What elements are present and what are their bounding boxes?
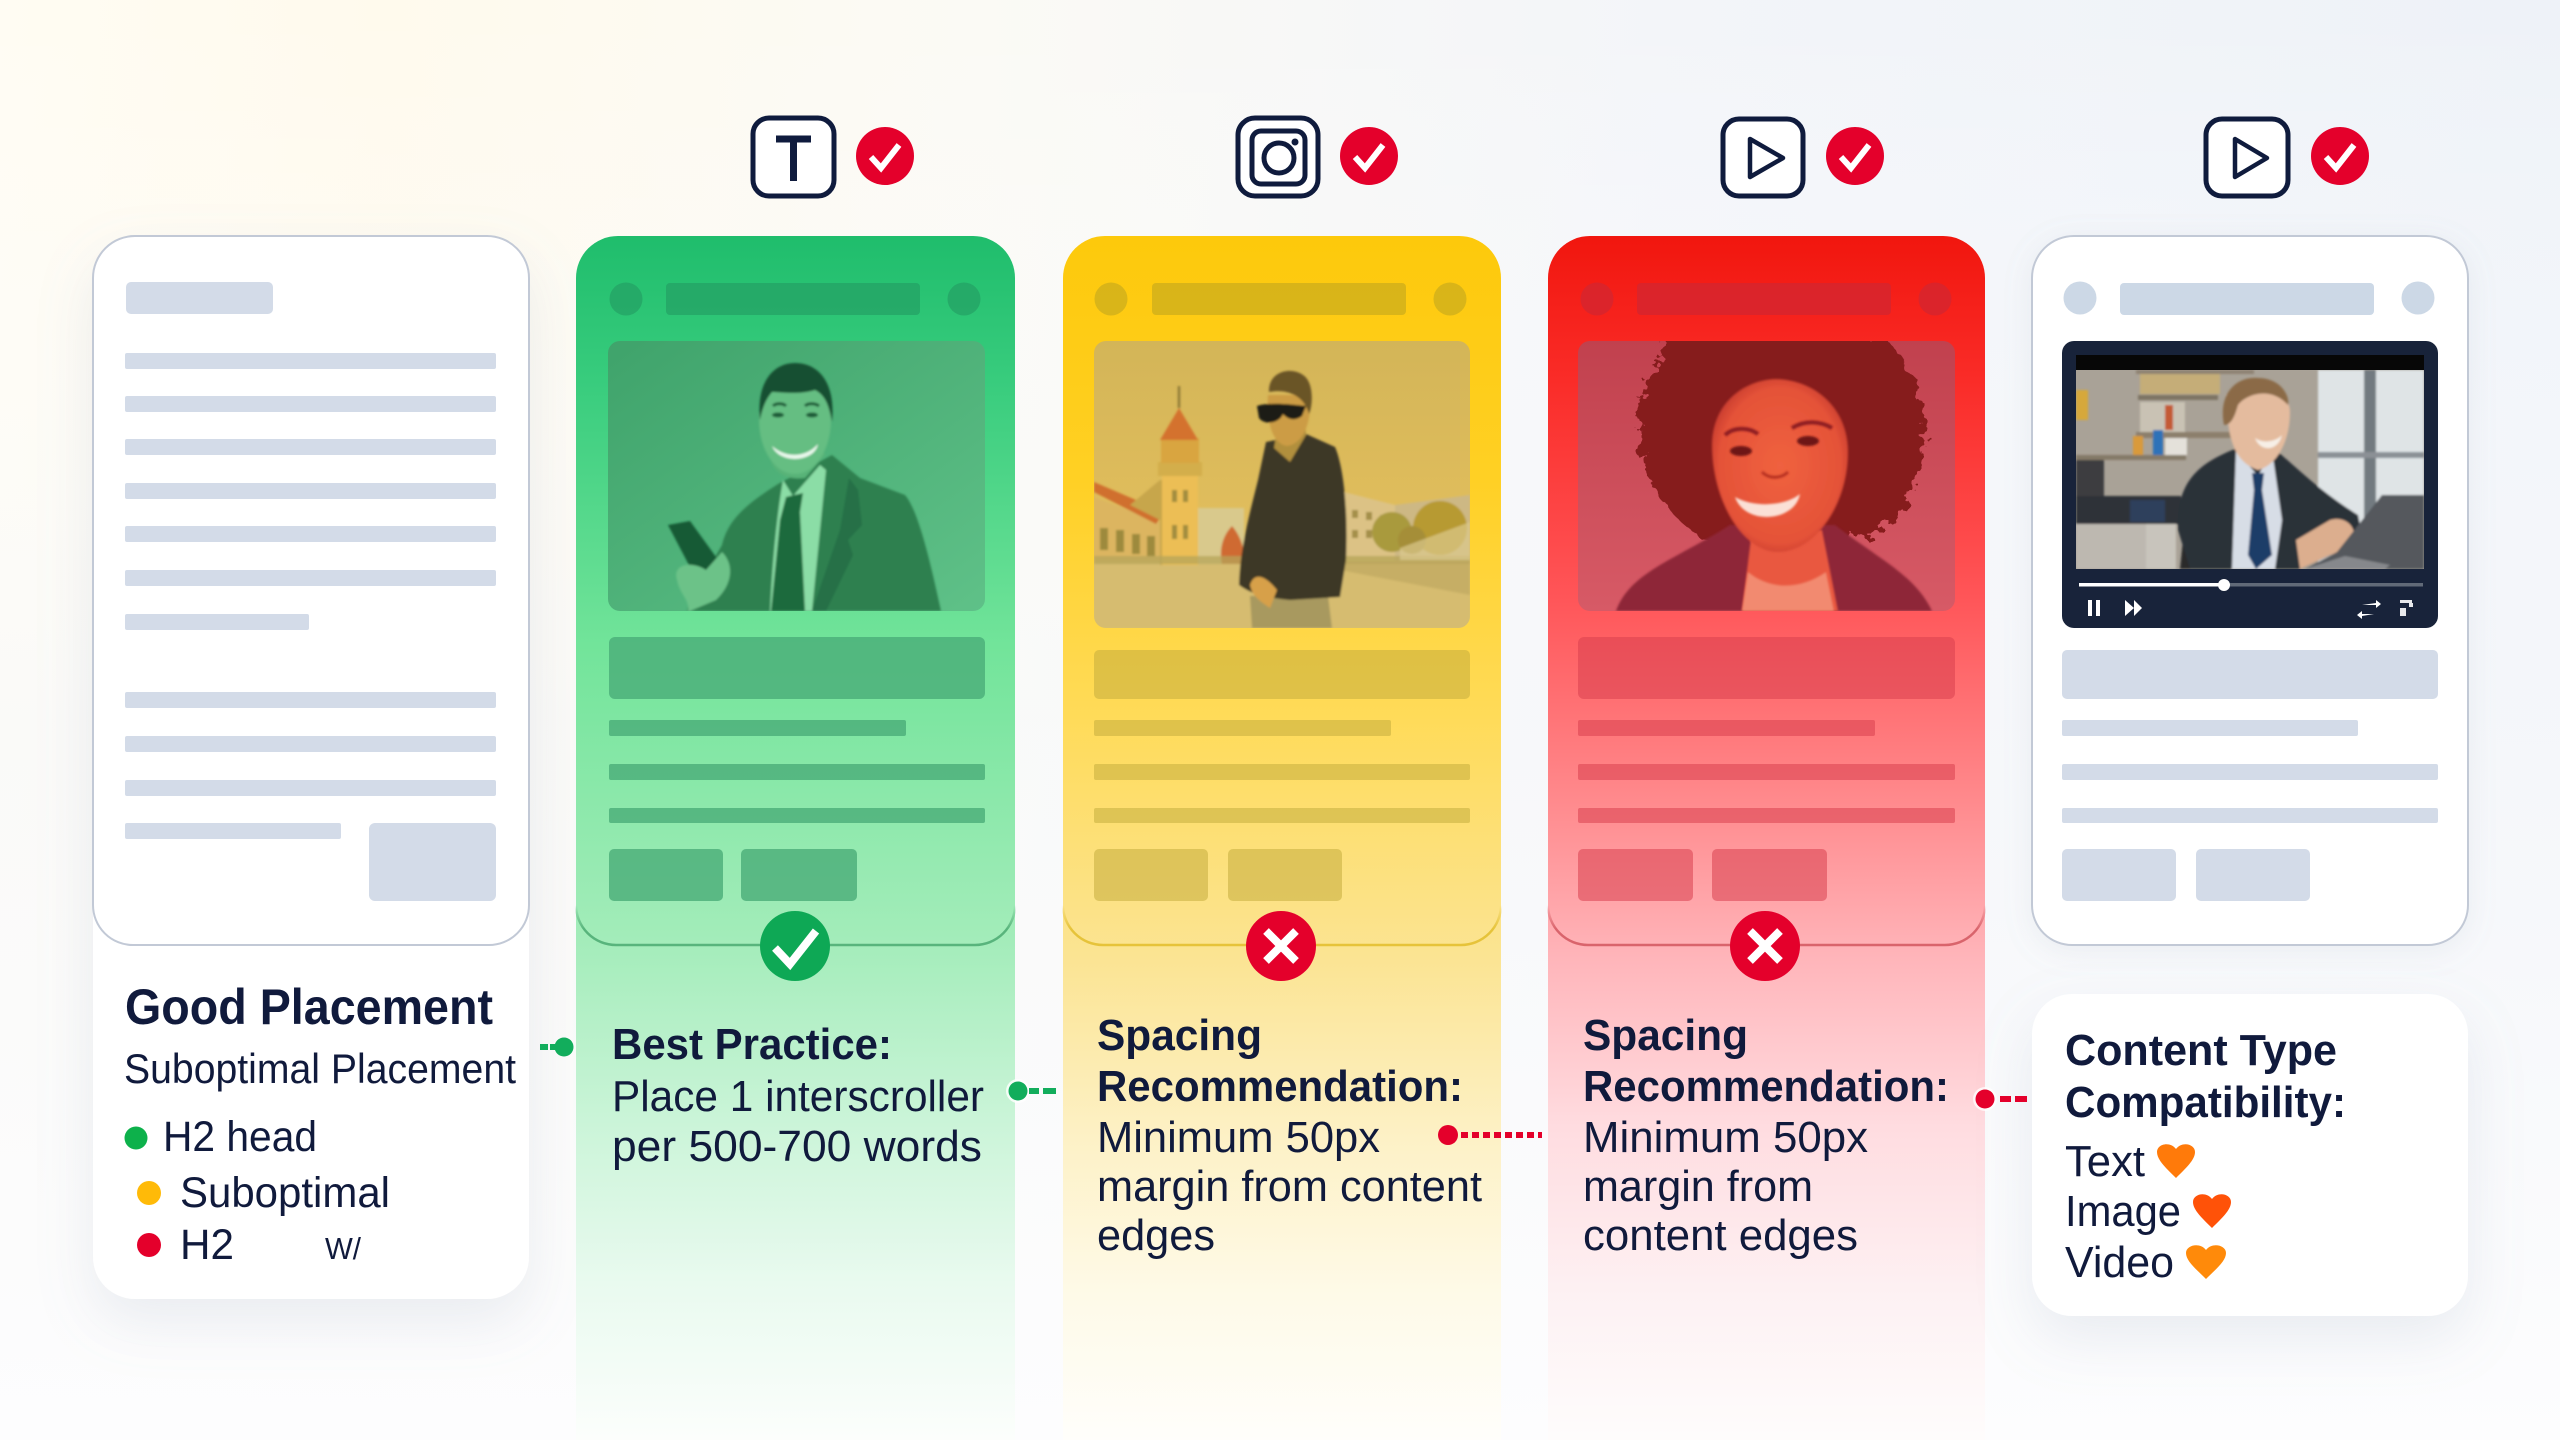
legend text: Suboptimal bbox=[180, 1169, 390, 1217]
card bottom edge bbox=[576, 905, 1015, 945]
legend text: W/ bbox=[325, 1231, 361, 1266]
video frame: man at laptop bbox=[2076, 370, 2424, 569]
spacing recommendation text: edges bbox=[1097, 1211, 1215, 1260]
header placeholders bbox=[1094, 282, 1466, 316]
icon: orange heart bbox=[2157, 1144, 2195, 1178]
connector: red dashed yellow to red bbox=[1438, 1125, 1542, 1145]
spacing recommendation text bbox=[1097, 1011, 1482, 1260]
icon: amber heart bbox=[2186, 1245, 2226, 1279]
content placeholders bbox=[1578, 637, 1955, 901]
best practice text: per 500-700 words bbox=[612, 1122, 982, 1171]
video player bbox=[2062, 341, 2438, 628]
spacing recommendation text: Spacing bbox=[1097, 1011, 1262, 1060]
icon: red-orange heart bbox=[2193, 1194, 2231, 1228]
yellow band bbox=[1063, 236, 1501, 1440]
best practice text bbox=[612, 1020, 984, 1171]
spacing recommendation text: content edges bbox=[1583, 1211, 1858, 1260]
header placeholders bbox=[2064, 282, 2434, 315]
icon: video format with check bbox=[1723, 119, 1884, 196]
photo: man with phone bbox=[608, 341, 985, 611]
panel: content type compatibility: Text bbox=[2065, 1137, 2145, 1186]
connector: red dashed to compatibility panel bbox=[1973, 1087, 2027, 1111]
photo: woman with curly hair bbox=[1578, 317, 1955, 611]
panel: content type compatibility: Compatibility: bbox=[2065, 1078, 2346, 1127]
panel: content type compatibility: Video bbox=[2065, 1238, 2174, 1287]
panel: content type compatibility bbox=[2032, 994, 2468, 1316]
content placeholders bbox=[1094, 650, 1470, 901]
spacing recommendation text bbox=[1583, 1011, 1949, 1260]
spacing recommendation text: margin from content bbox=[1097, 1162, 1482, 1211]
panel: text article card bbox=[93, 236, 529, 1299]
article text placeholders bbox=[125, 282, 496, 901]
spacing recommendation text: margin from bbox=[1583, 1162, 1813, 1211]
badge: red cross bbox=[1246, 911, 1316, 981]
panel: yellow spacing column bbox=[1063, 236, 1501, 1440]
spacing recommendation text: Spacing bbox=[1583, 1011, 1748, 1060]
phone outline bbox=[2032, 236, 2468, 945]
legend text bbox=[124, 979, 516, 1269]
icon: text format with check bbox=[753, 118, 914, 196]
spacing recommendation text: Recommendation: bbox=[1097, 1062, 1463, 1111]
card bottom edge bbox=[1063, 905, 1501, 945]
legend text: Good Placement bbox=[125, 979, 493, 1035]
badge: green check bbox=[760, 911, 830, 981]
legend text: Suboptimal Placement bbox=[124, 1045, 516, 1092]
white caption panel bbox=[93, 236, 529, 1299]
connector: green dashed 2 bbox=[1006, 1079, 1056, 1103]
panel: green best practice column bbox=[576, 236, 1015, 1440]
spacing recommendation text: Minimum 50px bbox=[1097, 1113, 1380, 1162]
phone outline bbox=[93, 236, 529, 945]
panel: video card bbox=[2032, 236, 2468, 945]
green band bbox=[576, 236, 1015, 1440]
content placeholders bbox=[2062, 650, 2438, 901]
card bottom edge bbox=[1548, 905, 1985, 945]
content placeholders bbox=[609, 637, 985, 901]
spacing recommendation text: Recommendation: bbox=[1583, 1062, 1949, 1111]
panel: content type compatibility: Image bbox=[2065, 1187, 2181, 1236]
best practice text: Place 1 interscroller bbox=[612, 1072, 984, 1121]
header placeholders bbox=[1580, 282, 1952, 316]
player controls bbox=[2088, 600, 2413, 619]
red band bbox=[1548, 236, 1985, 1440]
spacing recommendation text: Minimum 50px bbox=[1583, 1113, 1868, 1162]
panel: content type compatibility: Content Type bbox=[2065, 1026, 2337, 1075]
connector: green dashed 1 bbox=[540, 1038, 574, 1056]
best practice text: Best Practice: bbox=[612, 1020, 892, 1069]
legend text: H2 bbox=[180, 1221, 234, 1269]
photo: man in city square bbox=[1094, 341, 1470, 628]
header placeholders bbox=[610, 282, 980, 316]
legend text: H2 head bbox=[163, 1113, 317, 1161]
icon: instagram format with check bbox=[1238, 118, 1398, 196]
progress bar bbox=[2079, 579, 2423, 591]
panel: red spacing column bbox=[1548, 236, 1985, 1440]
badge: red cross bbox=[1730, 911, 1800, 981]
icon: video player format with check bbox=[2206, 119, 2369, 196]
